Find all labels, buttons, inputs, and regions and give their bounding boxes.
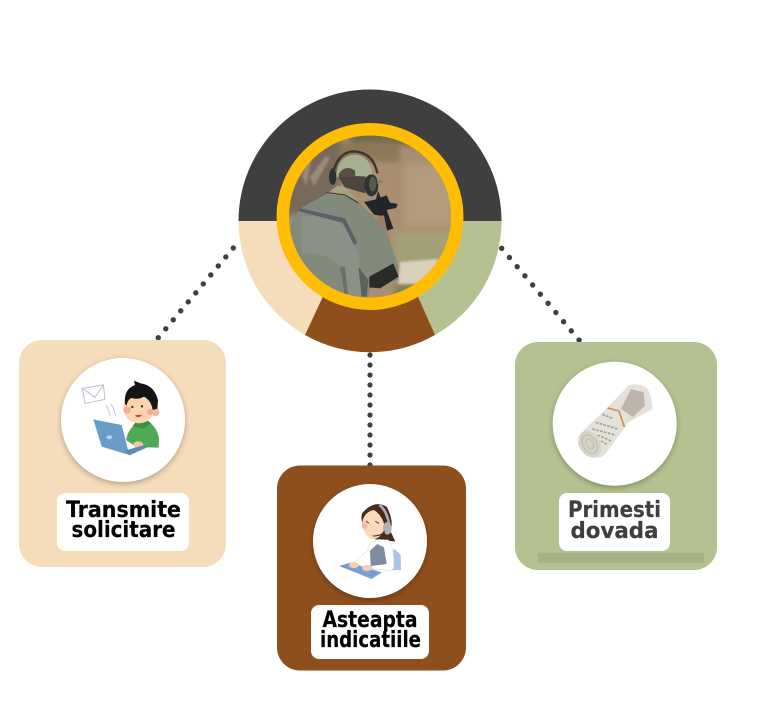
white sand patch [398,259,438,284]
segment: green [370,221,502,335]
dotted connector: middle [367,355,373,465]
hand [377,215,387,229]
shadow bar [538,553,704,563]
icon circle [313,484,427,598]
icon circle [553,362,677,486]
ear cups [329,168,336,185]
cap [336,155,373,177]
panel background [515,342,717,570]
icon: operator with headset at keyboard [339,504,401,579]
jacket [287,193,399,302]
segment: peach [238,221,370,335]
label box [311,605,429,659]
sleeve stripe [299,208,357,245]
label text: Asteapta [322,608,418,633]
elbow patch [369,263,399,288]
yellow ring [283,130,457,304]
central ring diagram [238,90,502,352]
icon: person with laptop sending mail [82,381,159,455]
panel: Primesti dovada: dovada [570,519,658,544]
headband [333,151,377,176]
segment: dark top [238,90,502,221]
label text: Transmite [66,498,181,523]
icon circle [61,358,185,482]
segment: brown [305,290,435,352]
panel: Asteapta indicatiile: indicatiile [320,628,421,653]
icon: rolled newspaper [574,384,652,461]
label text: Primesti [568,498,661,523]
label box [57,493,189,551]
neck and hair [337,176,366,193]
panel background [277,466,466,670]
panel: Transmite solicitare [19,340,226,567]
panel: Asteapta indicatiile [277,466,466,670]
fence posts [302,156,330,186]
dotted connector: right [502,248,579,340]
collar [327,185,359,202]
panel background [19,340,226,567]
panel: Primesti dovada [515,342,717,570]
photo: shooter at range [289,136,451,298]
rifle [364,191,398,231]
panel: Transmite solicitare: solicitare [72,518,176,543]
dotted connector: left [158,248,233,338]
label box [559,493,670,551]
